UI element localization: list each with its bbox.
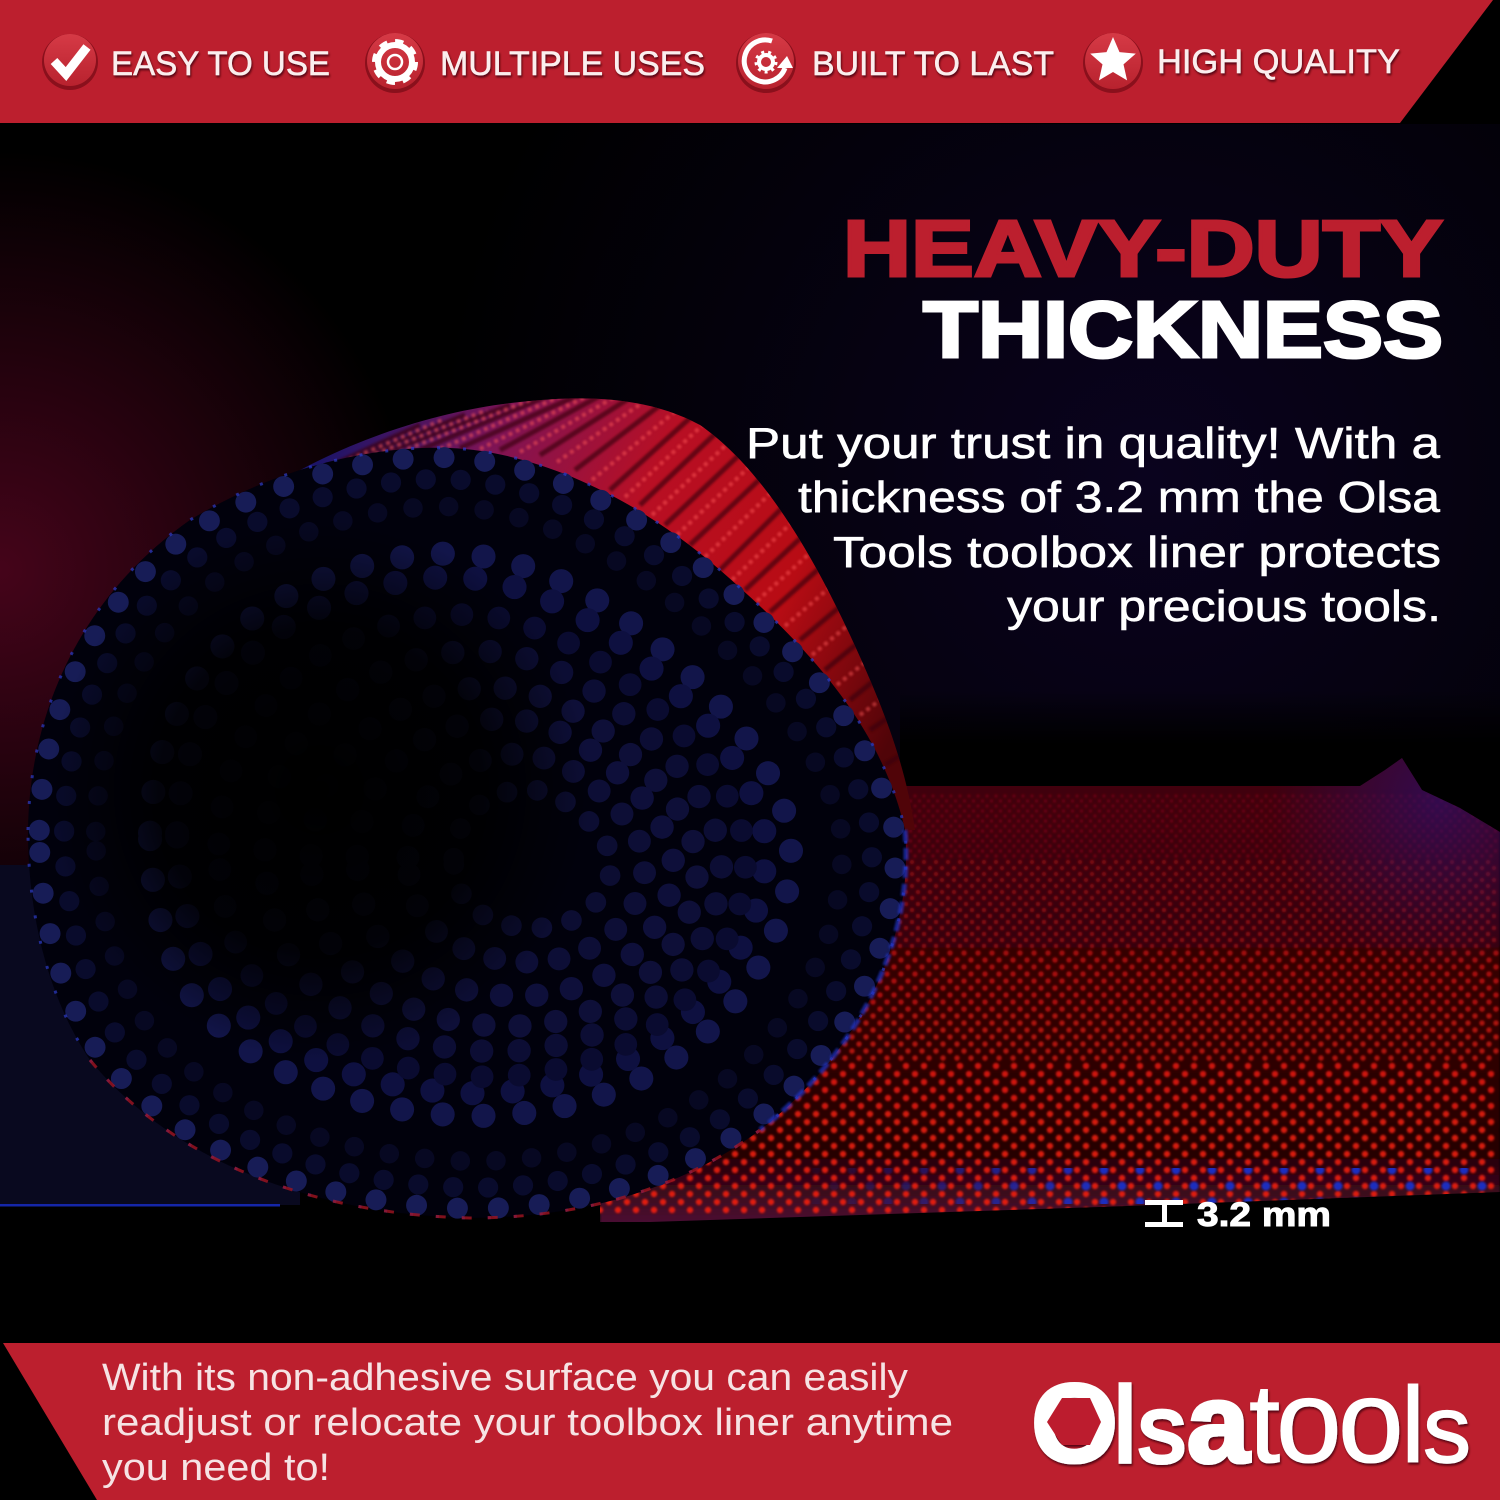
label: easy to use: EASY TO USE [111,45,330,83]
heading line: thickness: THICKNESS [923,285,1443,374]
rolled liner end face with spiral rows of dots [28,448,906,1218]
logo: olsatools: t [1249,1361,1280,1486]
icon: gear [365,33,425,93]
heading [843,204,1443,374]
logo: olsatools: o [1338,1356,1404,1488]
thickness callout [1145,1196,1331,1234]
body paragraph: Put your trust in quality! With a [746,419,1441,468]
bottom note text [102,1357,953,1489]
body paragraph: your precious tools. [1007,582,1441,631]
body paragraph: thickness of 3.2 mm the Olsa [798,473,1441,522]
logo: olsatools: O [1031,1361,1118,1486]
bottom banner [3,1343,1500,1500]
label: multiple uses: MULTIPLE USES [440,45,705,83]
label: 3.2 mm: 3.2 mm [1197,1196,1331,1234]
body paragraph: Tools toolbox liner protects [833,528,1441,577]
logo: olsatools: o [1276,1356,1342,1488]
logo: olsatools [1031,1356,1471,1488]
icon: check mark [42,34,98,90]
body paragraph [746,419,1441,631]
bottom note text: you need to! [102,1447,330,1489]
logo: olsatools: s [1138,1376,1186,1483]
icon: thickness marker [1145,1200,1183,1227]
flat unrolled liner mat [600,750,1500,1230]
label: high quality: HIGH QUALITY [1157,43,1400,81]
heading line: heavy-duty: HEAVY-DUTY [843,204,1443,293]
logo: olsatools: a [1187,1361,1250,1486]
icon: star [1083,33,1143,93]
top banner [0,0,1493,123]
bottom note text: readjust or relocate your toolbox liner anytime [102,1402,953,1444]
icon: cycle arrow with gear [736,33,796,93]
bottom note text: With its non-adhesive surface you can easily [102,1357,908,1399]
logo: olsatools: l [1401,1364,1425,1485]
logo: olsatools: s [1423,1376,1471,1483]
rolled liner outer surface [300,398,915,830]
label: built to last: BUILT TO LAST [812,45,1054,83]
logo: olsatools: l [1113,1364,1137,1485]
